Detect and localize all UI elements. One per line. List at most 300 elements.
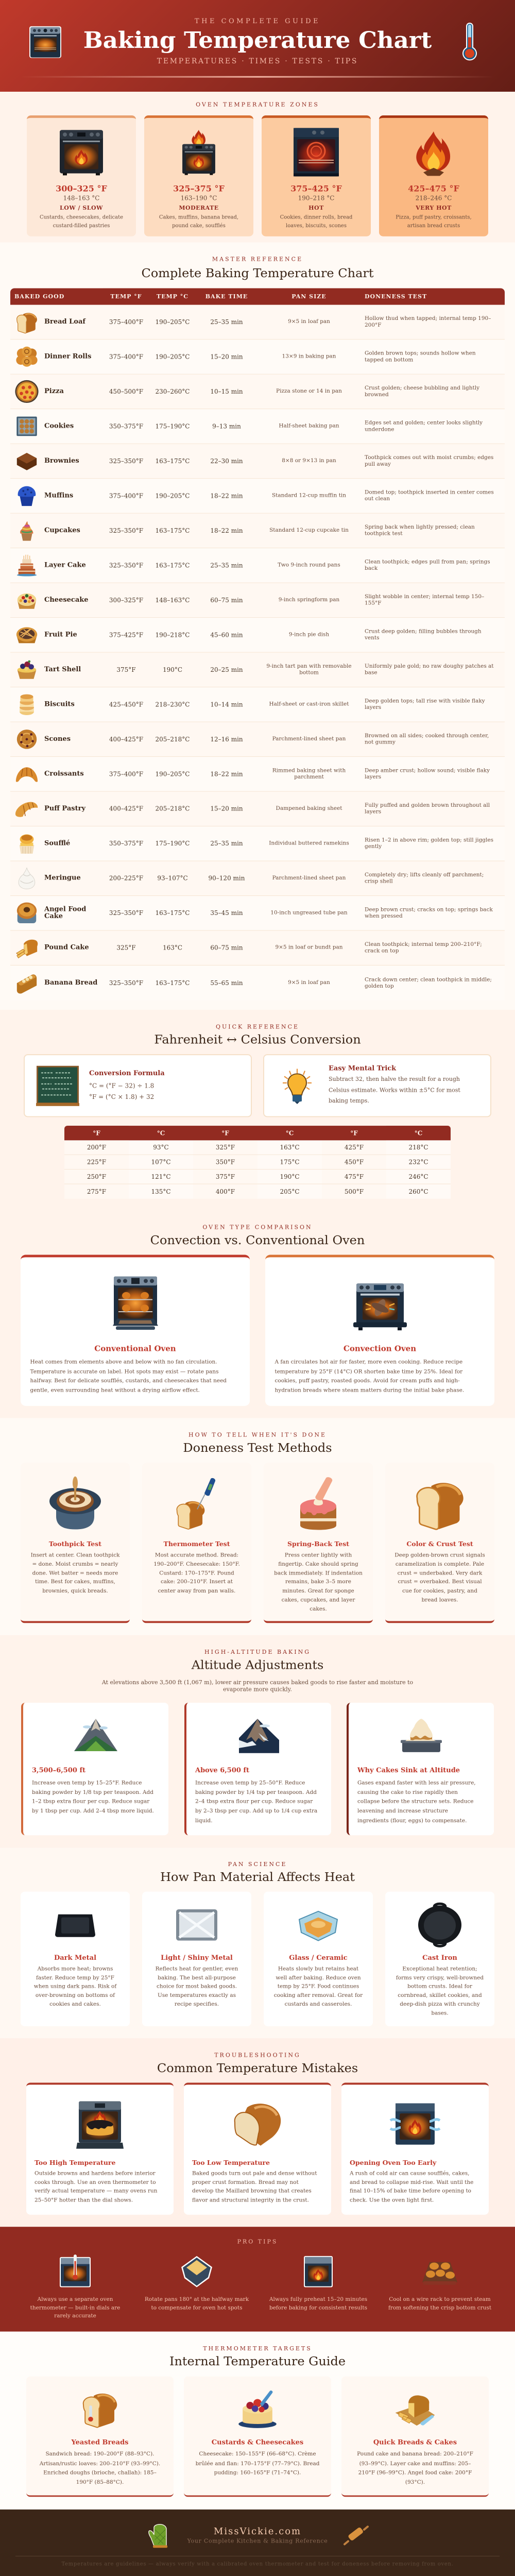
row: cupcakes — [10, 521, 505, 548]
row: biscuits — [10, 687, 505, 722]
icon: green mountain — [73, 1718, 119, 1753]
mistake text — [192, 2170, 317, 2205]
row: layer cake — [10, 548, 505, 583]
row: 218°C — [408, 1144, 428, 1151]
icon: toothpick in cake — [47, 1476, 104, 1531]
altitude text: leavening and increase structure — [357, 1808, 448, 1814]
material title: Dark Metal — [54, 1954, 96, 1962]
row: 475°F — [345, 1173, 364, 1180]
row: cookies: 9–13 min — [212, 423, 241, 430]
altitude text: collapse before the structure sets. Reduce — [357, 1799, 474, 1805]
row: biscuits: Half-sheet or cast-iron skillet — [269, 701, 349, 707]
row: cheesecake: 9-inch springform pan — [279, 597, 339, 603]
material description: custards and casseroles. — [285, 2001, 352, 2007]
row: muffins: Standard 12-cup muffin tin — [272, 493, 346, 499]
section label: HOW TO TELL WHEN IT'S DONE — [188, 1432, 327, 1438]
zone name: MODERATE — [179, 205, 219, 211]
oven title: Convection Oven — [344, 1344, 416, 1353]
icon: dark pan — [52, 1902, 98, 1947]
row: fruit pie: 190–218°C — [156, 632, 190, 638]
row: fruit pie: Fruit Pie — [44, 631, 77, 638]
panel: thermometer test — [142, 1463, 251, 1623]
mistake text: verify actual temperature — many ovens run — [35, 2188, 158, 2194]
panel: convection oven — [265, 1255, 494, 1406]
mistake text: final 10–15% of bake time before opening to — [350, 2188, 471, 2194]
test description: remains, bake 3–5 more — [285, 1579, 351, 1585]
section: oven temperature zones — [0, 92, 515, 242]
test description: cue for cookies, pastry, and — [402, 1588, 477, 1594]
guide title: Custards & Cheesecakes — [212, 2439, 303, 2447]
material description: temp by 25°F. Food continues — [278, 1984, 359, 1990]
icon: oven thermometer — [59, 2254, 92, 2289]
row: cupcakes: 18–22 min — [210, 527, 243, 534]
oven description: gentle, even surrounding heat without a drying airflow effect. — [30, 1387, 200, 1394]
mistake title: Opening Oven Too Early — [350, 2159, 436, 2166]
icon: oven — [29, 26, 61, 58]
row: layer cake: Two 9-inch round pans — [278, 562, 340, 568]
icon: cast iron skillet — [417, 1902, 463, 1947]
row: meringue: crisp shell — [365, 878, 393, 885]
table header row: TEMP °F — [110, 293, 142, 300]
row: pizza: 230–260°C — [156, 388, 190, 395]
zone uses: artisan bread crusts — [407, 224, 460, 229]
test description — [142, 1551, 251, 1596]
row: muffins: Muffins — [44, 492, 73, 499]
altitude intro: evaporate more quickly. — [223, 1686, 292, 1693]
row: dinner rolls: 13×9 in baking pan — [282, 353, 336, 360]
test description: minutes. Great for sponge — [282, 1588, 354, 1594]
conversion header row: °F — [350, 1129, 358, 1137]
guide text: Enriched doughs (brioche, challah): 185– — [43, 2470, 157, 2476]
test description: bread loaves. — [421, 1597, 458, 1603]
row — [64, 1170, 451, 1184]
table header row: TEMP °C — [157, 293, 188, 300]
row: cookies — [10, 409, 505, 444]
row: 200°F — [87, 1144, 106, 1151]
material description: deep-dish pizza with crunchy — [400, 2001, 480, 2007]
icon: preheating oven — [302, 2256, 335, 2288]
section heading: Doneness Test Methods — [183, 1440, 332, 1455]
panel: above 6,500 ft — [184, 1703, 331, 1835]
row: banana bread: 325–350°F — [109, 979, 143, 987]
temperature F: 425–475 °F — [408, 184, 459, 194]
row: 375°F — [216, 1173, 235, 1180]
trick text: Subtract 32, then halve the result for a rough — [329, 1076, 460, 1082]
icon: snow peak — [236, 1718, 282, 1754]
row: tart shell: Tart Shell — [44, 666, 81, 673]
row: pizza — [10, 380, 505, 409]
row: brownies: 163–175°C — [156, 457, 190, 465]
material description: baking. The best all-purpose — [158, 1975, 236, 1980]
row: bread loaf: 9×5 in loaf pan — [288, 318, 330, 325]
row: cheesecake: 60–75 min — [210, 597, 243, 604]
row: croissants: parchment — [294, 774, 324, 780]
zone name: LOW / SLOW — [60, 205, 103, 211]
row: pound cake: 9×5 in loaf or bundt pan — [275, 944, 343, 951]
mistake text: Baked goods turn out pale and dense without — [192, 2171, 317, 2176]
zone uses — [40, 215, 123, 229]
panel: 3,500-6,500 ft — [21, 1703, 168, 1835]
row: croissants: 375–400°F — [109, 770, 143, 777]
row: tart shell: base — [365, 670, 377, 676]
row: tart shell — [10, 660, 505, 687]
row: 246°C — [408, 1173, 428, 1180]
panel: very hot zone — [379, 115, 488, 236]
material description: faster. Reduce temp by 25°F — [36, 1975, 114, 1980]
row: layer cake: back — [365, 565, 377, 571]
panel: yeasted breads — [26, 2377, 174, 2497]
section: pan material — [0, 1848, 515, 2038]
material description: bases. — [431, 2010, 449, 2016]
altitude intro: At elevations above 3,500 ft (1,067 m), lower air pressure causes baked goods to rise faster and moisture to — [102, 1679, 413, 1686]
mistake title: Too High Temperature — [35, 2159, 115, 2166]
tip text — [21, 2295, 130, 2320]
altitude text — [32, 1778, 154, 1816]
mistake text: and bread to collapse mid-rise. Wait until the — [350, 2179, 473, 2185]
row: pizza: Pizza — [44, 387, 64, 395]
panel: too high temperature — [26, 2082, 174, 2215]
panel: quick breads and cakes — [341, 2377, 489, 2497]
row: pound cake: crack on top — [365, 948, 399, 954]
material description: choice for most baked goods. — [157, 1984, 237, 1990]
material description: cookies and cakes. — [49, 2001, 101, 2007]
test description: 190–200°F. Cheesecake: 150°F. — [153, 1561, 240, 1567]
row: dinner rolls — [10, 340, 505, 374]
test description: center away from pan walls. — [158, 1588, 235, 1594]
section label: MASTER REFERENCE — [212, 256, 303, 263]
row: angel food cake — [10, 903, 505, 930]
row: souffle: 350–375°F — [109, 840, 143, 847]
row: pizza: Crust golden; cheese bubbling and lightly — [365, 385, 479, 391]
guide text — [341, 2449, 489, 2487]
row: 500°F — [345, 1188, 364, 1195]
mistake text: cooks through. Use an oven thermometer to — [35, 2179, 156, 2185]
section: doneness test methods — [0, 1418, 515, 1635]
row: scones: 400–425°F — [109, 736, 143, 743]
panel: toothpick test — [21, 1463, 130, 1623]
row: pound cake: Pound Cake — [44, 944, 89, 952]
row: pound cake: Clean toothpick; internal temp 200–210°F; — [365, 941, 482, 947]
test description: cakes, cupcakes, and layer — [282, 1597, 355, 1603]
section heading: Altitude Adjustments — [192, 1658, 323, 1672]
mistake text: 25–50°F hotter than the dial shows. — [35, 2197, 133, 2203]
altitude text: baking powder by 1/8 tsp per teaspoon. Add — [32, 1789, 153, 1795]
panel: spring-back test — [264, 1463, 373, 1623]
test description: fingertip. Cake should spring — [278, 1561, 358, 1567]
row: cupcakes: Standard 12-cup cupcake tin — [269, 527, 349, 533]
altitude text: Increase oven temp by 25–50°F. Reduce — [195, 1780, 305, 1786]
icon: chalkboard — [36, 1065, 79, 1106]
row: cupcakes: 325–350°F — [109, 527, 143, 534]
row: scones — [10, 730, 505, 757]
row: souffle: 25–35 min — [210, 840, 243, 847]
row: tart shell: 20–25 min — [210, 666, 243, 673]
row: pound cake: 325°F — [116, 944, 136, 952]
row: souffle — [10, 835, 505, 861]
section: fahrenheit celsius conversion — [0, 1010, 515, 1219]
brand name: MissVickie.com — [214, 2526, 301, 2537]
row: banana bread: Crack down center; clean toothpick in middle; — [365, 976, 492, 982]
row: bread loaf: 375–400°F — [109, 318, 143, 326]
icon: thermometer — [462, 23, 477, 61]
test description: = done. Moist crumbs = nearly — [32, 1561, 118, 1567]
altitude text: liquid. — [195, 1818, 213, 1824]
material description — [21, 1965, 130, 2009]
guide text: pudding: 160–165°F (71–74°C). — [214, 2470, 301, 2476]
temperature F: 375–425 °F — [290, 184, 342, 194]
row: bread loaf — [10, 305, 505, 340]
tip: rotate pans — [142, 2253, 251, 2324]
section: altitude adjustments — [0, 1635, 515, 1848]
row: cheesecake: 300–325°F — [109, 597, 143, 604]
tip text: thermometer — built-in dials are — [30, 2304, 120, 2311]
row: meringue: 90–120 min — [209, 875, 245, 882]
test description: back immediately. If indentation — [274, 1570, 363, 1576]
guide text: 210°F (96–99°C). Angel food cake: 200°F — [358, 2470, 472, 2476]
test title: Spring-Back Test — [287, 1540, 349, 1548]
altitude text: 1–2 tbsp extra flour per cup. Reduce sugar — [32, 1799, 149, 1805]
test description — [264, 1551, 373, 1614]
row: 205°C — [280, 1188, 300, 1195]
row: 93°C — [153, 1144, 169, 1151]
guide title: Quick Breads & Cakes — [373, 2439, 457, 2447]
conversion header row: °F — [221, 1129, 229, 1137]
temperature C: 190–218 °C — [298, 195, 334, 201]
row: puff pastry: Puff Pastry — [44, 805, 85, 812]
row: cheesecake: Cheesecake — [44, 596, 89, 604]
test title: Thermometer Test — [164, 1540, 230, 1548]
test description: Insert at center. Clean toothpick — [31, 1552, 119, 1558]
test description: brownies, quick breads. — [42, 1588, 108, 1594]
section heading: Fahrenheit ↔ Celsius Conversion — [154, 1032, 361, 1046]
row: scones: Browned on all sides; cooked through center, — [365, 733, 489, 739]
brand tagline: Your Complete Kitchen & Baking Reference — [187, 2538, 328, 2544]
table header row: BAKE TIME — [205, 293, 248, 300]
panel: color and crust test — [385, 1463, 494, 1623]
guide text: Sandwich bread: 190–200°F (88–93°C). — [45, 2451, 154, 2457]
conversion header row — [64, 1126, 451, 1141]
formula text — [89, 1082, 154, 1100]
row: scones: Scones — [44, 735, 71, 743]
oven description: temperature by 25°F (14°C) OR shorten bake time by 25%. Ideal for — [275, 1368, 462, 1375]
row: souffle: 175–190°C — [156, 840, 190, 847]
tip text: Cool on a wire rack to prevent steam — [389, 2296, 491, 2302]
mistake text: develop the Maillard browning that creates — [192, 2188, 312, 2194]
row: cupcakes: toothpick test — [365, 531, 403, 537]
section: common temperature mistakes — [0, 2038, 515, 2227]
row: angel food cake: 325–350°F — [109, 909, 143, 917]
section label: PRO TIPS — [237, 2239, 278, 2245]
row: croissants: Rimmed baking sheet with — [272, 767, 346, 773]
test description: Custard: 170–175°F. Pound — [159, 1570, 234, 1576]
row: angel food cake: Cake — [44, 912, 63, 920]
row: banana bread: 9×5 in loaf pan — [288, 979, 330, 986]
oven title: Conventional Oven — [94, 1344, 176, 1353]
row: 232°C — [408, 1159, 428, 1165]
tip text: Always fully preheat 15–20 minutes — [269, 2296, 367, 2302]
row: angel food cake: 163–175°C — [156, 909, 190, 917]
row: brownies: pull away — [365, 461, 391, 467]
row: muffins: 18–22 min — [210, 493, 243, 499]
row — [64, 1155, 451, 1170]
test description: done. Wet batter = needs more — [32, 1570, 118, 1576]
icon: light bulb — [283, 1069, 312, 1104]
altitude title: Above 6,500 ft — [195, 1767, 249, 1774]
material description — [385, 1965, 494, 2018]
icon: finger pressing cake — [290, 1476, 347, 1531]
table header row — [10, 288, 505, 305]
material description: cooking after removal. Great for — [274, 1992, 363, 1998]
row: 163°C — [280, 1144, 300, 1151]
row: muffins: 375–400°F — [109, 493, 143, 499]
tip: oven thermometer — [21, 2253, 130, 2324]
row: banana bread: 163–175°C — [156, 979, 190, 987]
section label: HIGH-ALTITUDE BAKING — [204, 1649, 311, 1655]
row: angel food cake: when pressed — [365, 913, 403, 919]
row: bread loaf: Hollow thud when tapped; internal temp 190– — [365, 315, 491, 321]
row: bread loaf: Bread Loaf — [44, 318, 85, 326]
row: banana bread: golden top — [365, 983, 394, 989]
altitude text: ingredients (flour, eggs) to compensate. — [357, 1818, 467, 1824]
panel: easy mental trick — [263, 1054, 491, 1117]
icon: red hot oven — [294, 128, 339, 176]
panel: dark metal — [21, 1892, 130, 2026]
row: puff pastry: Fully puffed and golden brown throughout all — [365, 802, 490, 808]
material description: Exceptional heat retention; — [402, 1966, 477, 1972]
row: dinner rolls: 190–205°C — [156, 353, 190, 360]
zone uses: Custards, cheesecakes, delicate — [40, 215, 123, 220]
section label: TROUBLESHOOTING — [214, 2052, 301, 2058]
panel: cast iron — [385, 1892, 494, 2026]
row: cookies: Half-sheet baking pan — [279, 423, 339, 429]
test description — [385, 1551, 494, 1605]
mistake text — [35, 2170, 158, 2205]
guide text: (93°C). — [405, 2479, 425, 2485]
icon: bread with thermometer — [79, 2388, 121, 2429]
icon: oven with open door — [105, 1274, 166, 1334]
row: layer cake: 25–35 min — [210, 562, 243, 569]
material description — [142, 1965, 251, 2009]
row: meringue: Completely dry; lifts cleanly off parchment; — [365, 872, 484, 878]
oven description — [30, 1358, 227, 1395]
material description: well after baking. Reduce oven — [276, 1975, 361, 1980]
test description: crust = overbaked. Best visual — [398, 1579, 482, 1585]
title: Baking Temperature Chart — [83, 27, 432, 54]
row: souffle: gently — [365, 843, 382, 850]
row: 450°F — [345, 1159, 364, 1165]
formula title: Conversion Formula — [89, 1070, 165, 1077]
section label: THERMOMETER TARGETS — [203, 2345, 312, 2352]
material description: forms very crispy, well-browned — [396, 1975, 484, 1980]
row: 325°F — [216, 1144, 235, 1151]
table header row: DONENESS TEST — [365, 293, 427, 300]
disclaimer: Temperatures are guidelines — always verify with a calibrated oven thermometer and test for doneness before removing from oven. — [61, 2562, 454, 2567]
tip text: rarely accurate — [54, 2313, 96, 2319]
icon: pound cake on board — [394, 2388, 436, 2429]
oven description: hydration breads where steam matters during the initial bake phase. — [275, 1387, 464, 1394]
row: banana bread: 55–65 min — [210, 979, 243, 987]
section label: OVEN TYPE COMPARISON — [202, 1224, 313, 1230]
row: cookies: underdone — [365, 426, 394, 432]
row: 107°C — [151, 1159, 171, 1165]
panel: opening oven too early — [341, 2082, 489, 2215]
altitude text: by 1 tbsp per cup. Add 2–4 tbsp more liquid. — [32, 1808, 154, 1814]
section: oven type comparison — [0, 1219, 515, 1418]
test description: cake: 200–210°F. Insert at — [161, 1579, 233, 1585]
material description — [264, 1965, 373, 2009]
icon: thermometer in bread — [168, 1476, 225, 1531]
row: meringue — [10, 868, 505, 896]
row: brownies: Toothpick comes out with moist crumbs; edges — [365, 454, 493, 461]
altitude text: by 2–3 tbsp per cup. Add up to 1/4 cup extra — [195, 1808, 317, 1814]
trick text: Celsius estimate. Works within ±5°C for most — [329, 1087, 460, 1093]
footer — [0, 2510, 515, 2576]
row: cupcakes: Spring back when lightly pressed; clean — [365, 524, 475, 530]
mistake text — [350, 2170, 473, 2205]
icon: oven with burnt cake — [74, 2099, 126, 2150]
section heading: Common Temperature Mistakes — [157, 2061, 358, 2075]
panel: too low temperature — [184, 2082, 331, 2215]
oven description — [275, 1358, 464, 1395]
row: layer cake: 325–350°F — [109, 562, 143, 569]
panel: custards and cheesecakes — [184, 2377, 331, 2497]
icon: pan rotating — [180, 2255, 213, 2289]
row: puff pastry: 205–218°C — [156, 805, 190, 812]
row: 135°C — [151, 1188, 171, 1195]
mistake text: check. Use the oven light first. — [350, 2197, 434, 2203]
row: meringue: 200–225°F — [109, 875, 143, 882]
row: puff pastry: Dampened baking sheet — [276, 805, 342, 811]
row: muffins: 190–205°C — [156, 493, 190, 499]
row: tart shell: 9-inch tart pan with removable — [266, 663, 352, 669]
row: 425°F — [345, 1144, 364, 1151]
row: fruit pie: 45–60 min — [210, 632, 243, 638]
material description: Use temperatures exactly as — [158, 1992, 236, 1998]
conversion header row: °C — [286, 1129, 294, 1137]
row: croissants: Deep amber crust; hollow sound; visible flaky — [365, 768, 490, 773]
row: 121°C — [151, 1173, 171, 1180]
icon: rolls on wire rack — [421, 2260, 458, 2286]
row: fruit pie: 375–425°F — [109, 632, 143, 638]
footer rule — [15, 2555, 500, 2557]
mistake title: Too Low Temperature — [192, 2159, 270, 2166]
tip text: Rotate pans 180° at the halfway mark — [145, 2296, 249, 2302]
section heading: How Pan Material Affects Heat — [160, 1870, 355, 1884]
row: cookies: 175–190°C — [156, 423, 190, 430]
row: brownies: Brownies — [44, 457, 79, 465]
row: souffle: Individual buttered ramekins — [269, 840, 349, 846]
row: brownies: 8×8 or 9×13 in pan — [282, 457, 336, 464]
formula text: °F = (°C × 1.8) + 32 — [89, 1093, 154, 1100]
material description: when using dark pans. Risk of — [34, 1984, 116, 1990]
altitude text — [357, 1778, 476, 1825]
row — [64, 1140, 451, 1155]
icon: rolling pin — [343, 2526, 369, 2546]
section heading: Internal Temperature Guide — [169, 2354, 346, 2368]
altitude text — [195, 1778, 317, 1825]
test title: Color & Crust Test — [406, 1540, 473, 1548]
row: pizza: 10–15 min — [210, 388, 243, 395]
row: cheesecake: 148–163°C — [156, 597, 190, 604]
row: cupcakes: Cupcakes — [44, 527, 80, 534]
tip text — [385, 2295, 494, 2312]
material title: Cast Iron — [422, 1954, 457, 1962]
row: pound cake: 60–75 min — [210, 944, 243, 952]
row: croissants — [10, 767, 505, 791]
tip text — [142, 2295, 251, 2312]
altitude text: Increase oven temp by 15–25°F. Reduce — [32, 1780, 142, 1786]
test description: Press center lightly with — [285, 1552, 352, 1558]
